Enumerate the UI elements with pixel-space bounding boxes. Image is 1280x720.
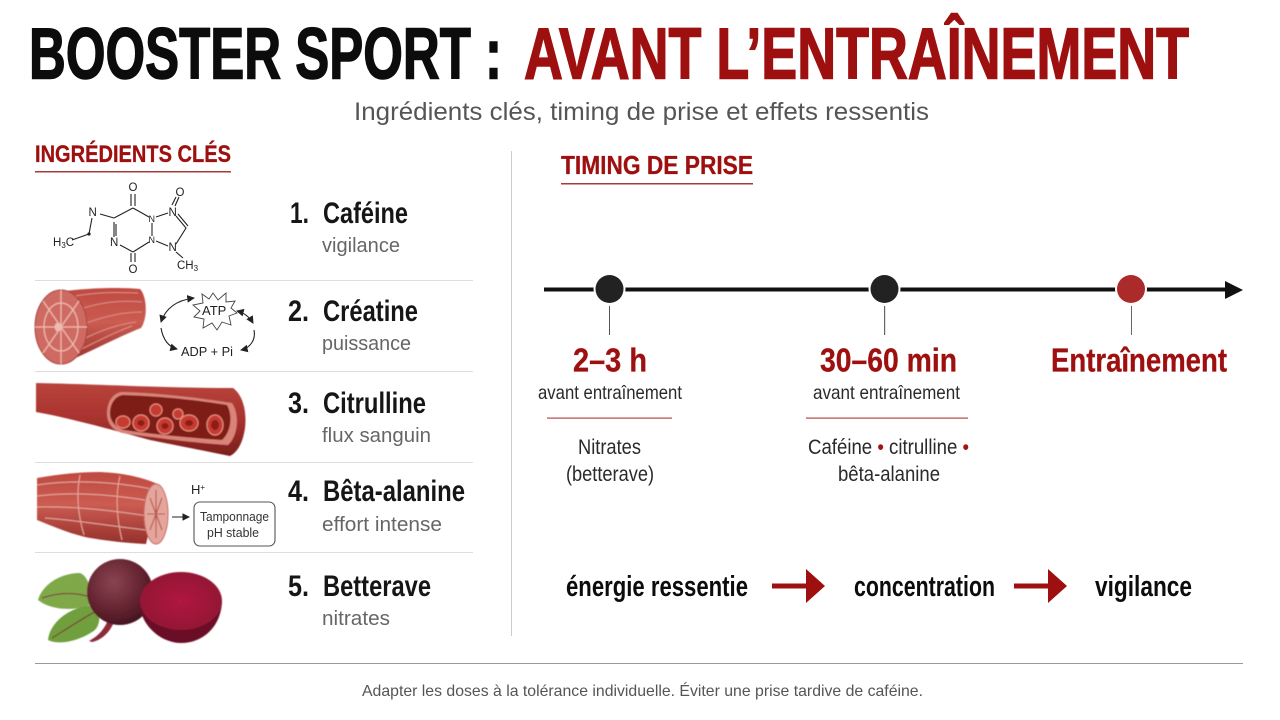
étape: 30–60 min: Caféine • citrulline • bbox=[808, 436, 969, 459]
effets ressentis bbox=[566, 569, 1192, 603]
étape: 2–3 h: (betterave) bbox=[566, 463, 654, 486]
icon: molécule de caféine: O bbox=[176, 187, 184, 199]
ingredient 5: nitrates bbox=[322, 607, 390, 630]
étape: 2–3 h bbox=[538, 342, 682, 486]
arrow 1 bbox=[772, 569, 825, 603]
title bbox=[29, 14, 1189, 94]
title: BOOSTER SPORT : bbox=[29, 14, 502, 94]
icon: molécule de caféine bbox=[53, 182, 199, 276]
icon: muscle et tamponnage: Tamponnage bbox=[200, 509, 269, 524]
ingredient 5 bbox=[288, 570, 431, 630]
icon: molécule de caféine: 3 bbox=[194, 264, 199, 273]
cycle ATP bbox=[161, 293, 254, 359]
étape: 30–60 min: 30–60 min bbox=[820, 342, 957, 378]
ingredient 3: Citrulline bbox=[323, 387, 426, 420]
ingredient 4 bbox=[288, 475, 465, 536]
panel: ingrédients clés bbox=[35, 140, 473, 643]
ingredient 4: 4. bbox=[288, 475, 309, 508]
étape: 2–3 h: avant entraînement bbox=[538, 382, 682, 404]
icon: molécule de caféine: N bbox=[110, 237, 118, 249]
ingredient 1 bbox=[290, 197, 408, 257]
icon: molécule de caféine: N bbox=[148, 214, 155, 224]
étape: entraînement: Entraînement bbox=[1051, 342, 1227, 378]
étape: 2–3 h: Nitrates bbox=[578, 436, 641, 459]
footer note: Adapter les doses à la tolérance individuelle. Éviter une prise tardive de caféine. bbox=[362, 681, 923, 700]
étape: 30–60 min bbox=[806, 342, 969, 486]
effets ressentis: concentration bbox=[854, 571, 995, 603]
icon: muscle et tamponnage bbox=[37, 472, 275, 546]
icon: molécule de caféine: 3 bbox=[61, 241, 66, 250]
subtitle: Ingrédients clés, timing de prise et effets ressentis bbox=[354, 98, 929, 126]
muscle bbox=[35, 288, 146, 364]
étape: 30–60 min: bêta-alanine bbox=[838, 463, 940, 486]
icon: molécule de caféine: N bbox=[168, 242, 177, 254]
icon: molécule de caféine: N bbox=[168, 207, 177, 219]
timeline bbox=[544, 273, 1243, 335]
ingredient 2: 2. bbox=[288, 295, 309, 328]
effets ressentis: vigilance bbox=[1095, 571, 1192, 603]
ingredient 3: flux sanguin bbox=[322, 424, 431, 447]
étape: 2–3 h: 2–3 h bbox=[573, 342, 647, 378]
ingredient 5: 5. bbox=[288, 570, 309, 603]
cycle ATP: ATP bbox=[202, 303, 226, 318]
ingredient 3 bbox=[288, 387, 431, 447]
icon: molécule de caféine: O bbox=[128, 264, 138, 276]
ingredient 2: Créatine bbox=[323, 295, 418, 328]
panel: timing de prise bbox=[538, 150, 1243, 603]
icon: muscle et tamponnage: H bbox=[191, 482, 200, 497]
icon: molécule de caféine: CH bbox=[177, 260, 194, 272]
ingredient 1: Caféine bbox=[323, 197, 408, 230]
ingredient 2: puissance bbox=[322, 332, 411, 355]
ingredient 4: Bêta-alanine bbox=[323, 475, 465, 508]
icon: vaisseau sanguin bbox=[36, 383, 246, 456]
étape: 30–60 min: avant entraînement bbox=[813, 382, 961, 404]
icon: muscle et tamponnage: pH stable bbox=[207, 525, 259, 540]
arrow 2 bbox=[1014, 569, 1067, 603]
icon: betterave bbox=[38, 559, 222, 643]
heading: ingrédients clés: INGRÉDIENTS CLÉS bbox=[35, 140, 231, 168]
icon: molécule de caféine: H bbox=[53, 237, 61, 249]
ingredient 3: 3. bbox=[288, 387, 309, 420]
icon: molécule de caféine: N bbox=[148, 235, 155, 245]
heading: timing de prise: TIMING DE PRISE bbox=[561, 150, 753, 180]
ingredient 1: 1. bbox=[290, 197, 309, 230]
ingredient 5: Betterave bbox=[323, 570, 431, 603]
icon: molécule de caféine: C bbox=[66, 237, 74, 249]
ingredient 4: effort intense bbox=[322, 513, 442, 536]
icon: molécule de caféine: O bbox=[128, 182, 138, 194]
row separators bbox=[35, 280, 473, 553]
icon: muscle en coupe et cycle ATP bbox=[35, 288, 254, 364]
cycle ATP: ADP + Pi bbox=[181, 345, 233, 359]
icon: molécule de caféine: N bbox=[88, 207, 97, 219]
effets ressentis: énergie ressentie bbox=[566, 571, 748, 603]
icon: muscle et tamponnage: + bbox=[200, 483, 205, 492]
ingredient 1: vigilance bbox=[322, 234, 400, 257]
ingredient 2 bbox=[288, 295, 418, 355]
